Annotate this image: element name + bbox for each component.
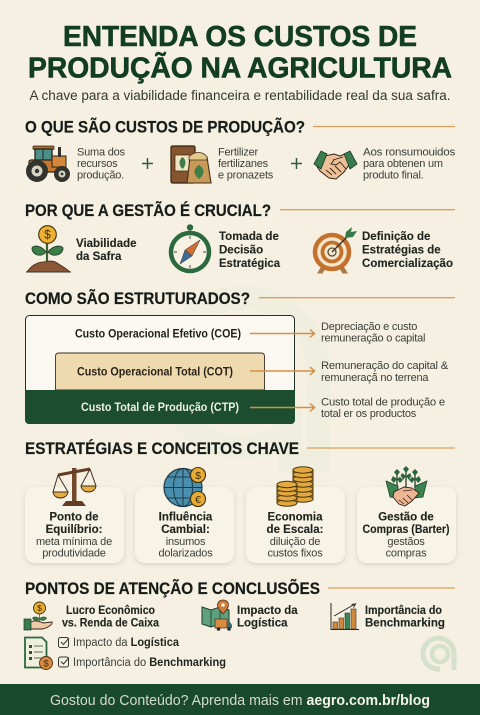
text: vs. Renda de Caixa [62, 618, 160, 630]
text: Benchmarking [365, 618, 445, 630]
note: CTP [321, 397, 445, 420]
note: COT: remuneraçã no terrena [321, 372, 429, 384]
subtitle: A chave para a viabilidade financeira e rentabilidade real da sua safra. [30, 88, 450, 103]
icon: sprout with coin [26, 226, 71, 272]
bottom band CTP [25, 390, 295, 424]
text [76, 238, 137, 263]
arrow [250, 404, 314, 412]
card: economia de escala: custos fixos [267, 548, 323, 560]
text [218, 146, 274, 182]
icon: scales [53, 468, 96, 506]
icon: bar chart benchmarking [331, 603, 359, 630]
note: COT: Remuneração do capital & [321, 360, 449, 372]
text: Estratégica [219, 258, 281, 270]
text: Estratégias de [362, 244, 441, 256]
card: ponto de equilíbrio: Ponto de [49, 512, 99, 524]
text: Tomada de [219, 231, 279, 243]
icon: tractor [26, 146, 70, 182]
card: influência cambial: Influência [159, 512, 213, 524]
card: gestão de compras [357, 466, 456, 563]
card: influência cambial [135, 468, 234, 563]
icon: plants and handshake [386, 466, 427, 506]
text: Suma dos [77, 146, 125, 158]
card: gestão de compras: compras [386, 548, 427, 560]
icon: hand with coin plant: $ [37, 603, 42, 613]
logo watermark [423, 638, 454, 670]
checklist item: Importância do Benchmarking [73, 657, 226, 669]
text: da Safra [76, 251, 122, 263]
icon: checklist with coin: $ [43, 658, 49, 670]
footer [0, 684, 480, 715]
text: produção. [77, 170, 124, 182]
card: economia de escala: de Escala: [267, 524, 323, 536]
note: COT [321, 360, 449, 384]
arrow [250, 367, 314, 375]
text: Aos ronsumouidos [363, 146, 456, 158]
cost structure diagram [25, 316, 295, 424]
checklist item: Impacto da Logística [73, 637, 180, 649]
text [365, 605, 445, 630]
text [219, 231, 281, 270]
text: Logística [237, 618, 288, 630]
card: economia de escala [246, 467, 345, 563]
icon: globe with coins [164, 468, 206, 506]
text: Comercialização [362, 258, 453, 270]
title: PRODUÇÃO NA AGRICULTURA [28, 52, 452, 84]
card: economia de escala: diluição de [270, 536, 320, 548]
text [77, 146, 125, 182]
plus [142, 158, 153, 169]
heading: COMO SÃO ESTRUTURADOS? [25, 288, 250, 308]
label COT: Custo Operacional Total (COT) [77, 366, 233, 378]
section: estratégias e conceitos chave [25, 439, 456, 563]
card: influência cambial: Cambial: [161, 524, 210, 536]
section: como são estruturados [25, 288, 455, 424]
card: influência cambial: insumos [166, 536, 206, 548]
arrow [250, 330, 314, 338]
card: economia de escala: Economia [268, 512, 323, 524]
text: produto final. [363, 170, 424, 182]
text: Importância do [365, 605, 442, 617]
card: gestão de compras: Gestão de [378, 512, 434, 524]
text: fertilizanes [218, 158, 269, 170]
text: Fertilizer [218, 146, 259, 158]
card: ponto de equilíbrio: produtividade [42, 548, 106, 560]
label COE: Custo Operacional Efetivo (COE) [75, 328, 241, 340]
text: Impacto da [237, 605, 298, 617]
icon: globe with coins: € [195, 494, 201, 506]
text: recursos [77, 158, 118, 170]
icon: target with arrow [315, 227, 357, 274]
icon: handshake [314, 151, 357, 179]
card: gestão de compras: gestãos [387, 536, 425, 548]
card: gestão de compras: Compras (Barter) [362, 524, 450, 536]
text: Viabilidade [76, 238, 137, 250]
text [237, 605, 298, 630]
plus [291, 158, 302, 169]
text [62, 605, 160, 630]
text [362, 231, 453, 270]
text: para obtenen um [363, 158, 443, 170]
icon: sprout with coin: $ [44, 230, 51, 242]
text: Definição de [362, 231, 430, 243]
icon: compass [171, 224, 209, 271]
heading: PONTOS DE ATENÇÃO E CONCLUSÕES [25, 578, 320, 598]
icon: globe with coins: $ [195, 470, 201, 482]
note: COE: Depreciação e custo [321, 321, 417, 333]
icon: coin stacks [277, 467, 313, 506]
card: influência cambial: dolarizados [158, 548, 213, 560]
note: COE [321, 321, 425, 345]
text: Lucro Econômico [66, 605, 155, 617]
icon: map with truck [202, 600, 232, 631]
background watermark [167, 297, 319, 460]
icon: checklist with coin [25, 638, 52, 670]
card: ponto de equilíbrio: Equilíbrio: [46, 524, 102, 536]
note: CTP: Custo total de produção e [321, 397, 445, 409]
section: o que são custos de produção [25, 116, 456, 183]
heading: ESTRATÉGIAS E CONCEITOS CHAVE [25, 439, 299, 458]
section: por que a gestão é crucial [25, 200, 455, 274]
icon: hand with coin plant [24, 602, 52, 630]
text [363, 146, 456, 182]
footer: Gostou do Conteúdo? Aprenda mais em aegro.com.br/blog [50, 692, 430, 709]
text: e pronazets [218, 170, 274, 182]
outer box COE [26, 316, 294, 424]
note: COE: remuneração o capital [321, 333, 425, 345]
heading: POR QUE A GESTÃO É CRUCIAL? [25, 200, 271, 220]
heading: O QUE SÃO CUSTOS DE PRODUÇÃO? [25, 116, 305, 136]
note: CTP: total er os productos [321, 408, 417, 420]
card: ponto de equilíbrio: meta mínima de [36, 536, 112, 548]
inner box COT [56, 353, 264, 390]
card: ponto de equilíbrio [25, 468, 124, 563]
text: Decisão [219, 244, 263, 256]
section: pontos de atenção e conclusões [24, 578, 455, 670]
title: ENTENDA OS CUSTOS DE [63, 21, 417, 53]
label CTP: Custo Total de Produção (CTP) [81, 402, 239, 414]
icon: fertilizer bags [171, 146, 211, 183]
title [28, 21, 452, 84]
